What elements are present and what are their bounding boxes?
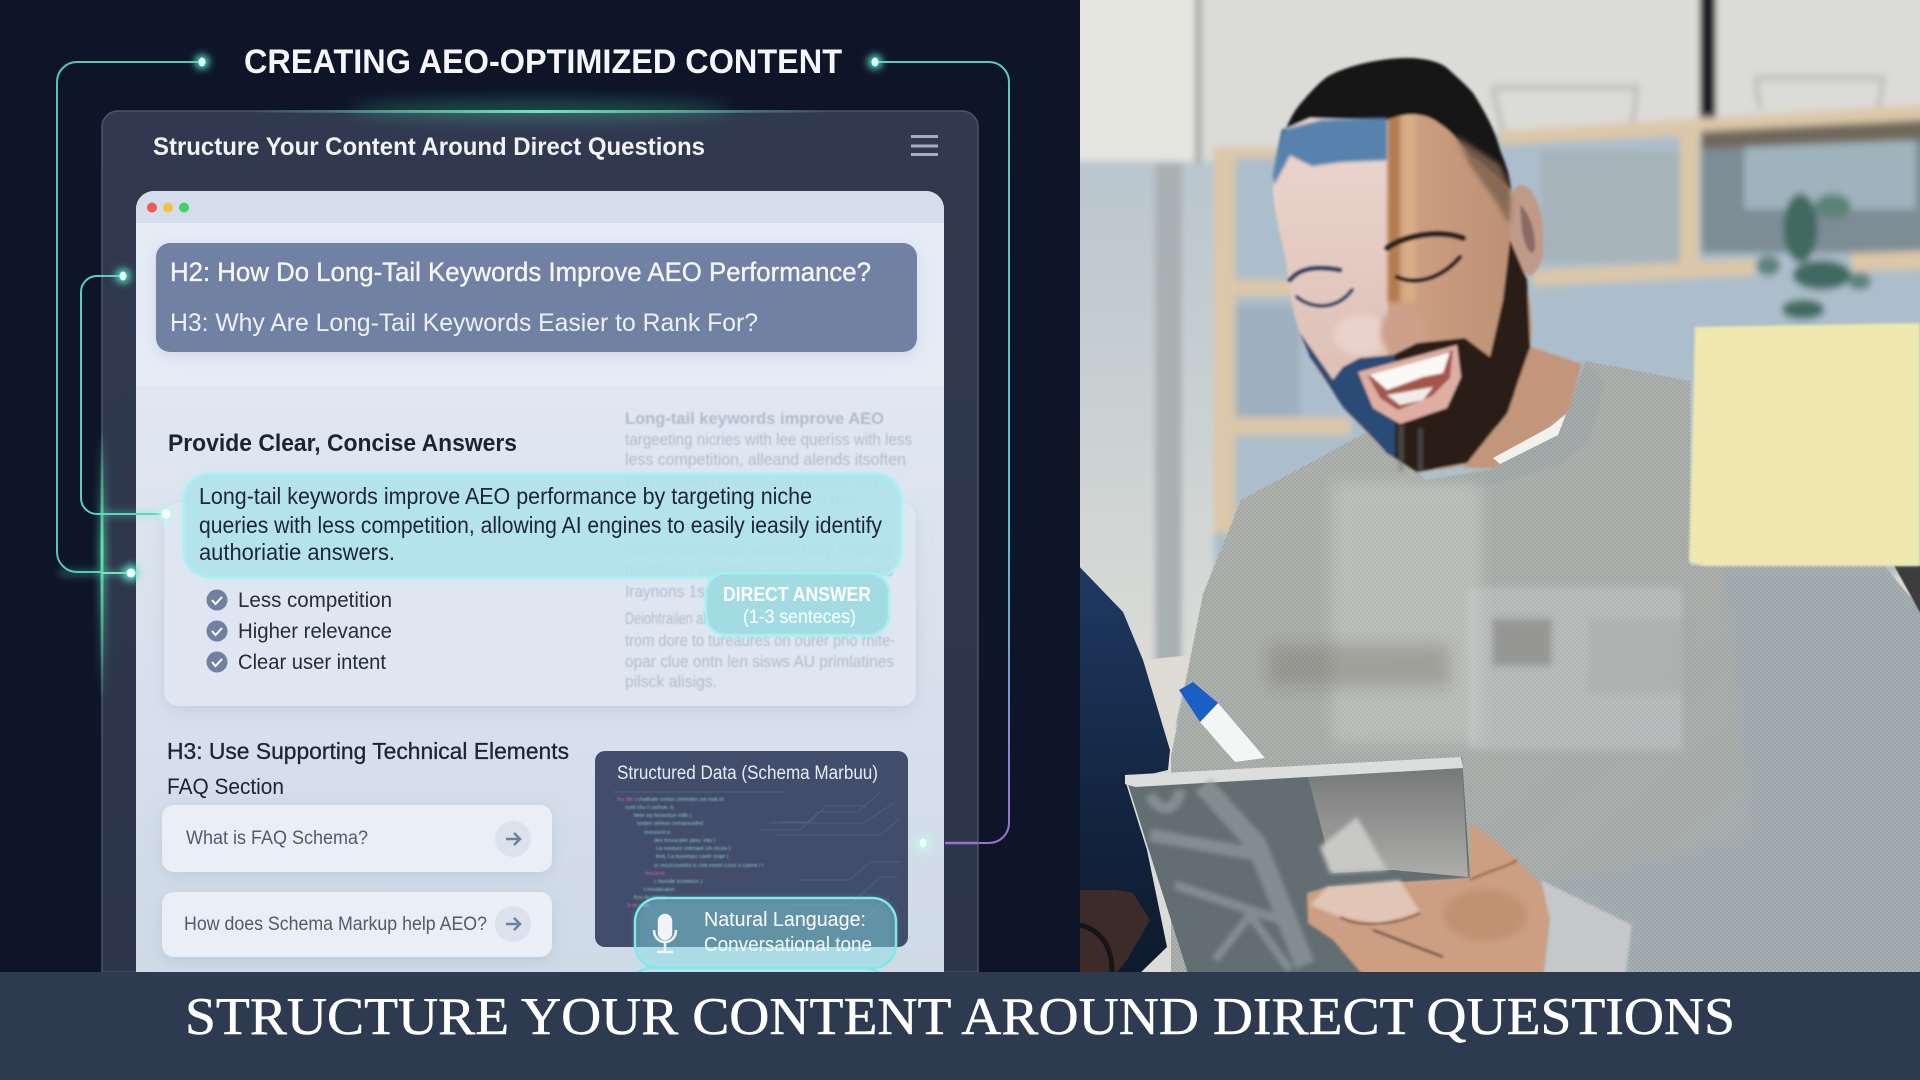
photo: sleeve cuff (1541, 880, 1632, 980)
background: dark navy left area (0, 0, 1080, 972)
heading: provide clear answers: Provide Clear, Concise Answers (168, 430, 517, 457)
heading: technical elements: H3: Use Supporting Technical Elements (167, 738, 569, 764)
photo: smiling man writing on tablet (1059, 0, 1920, 1000)
nose (1334, 312, 1421, 356)
text block: faded background article text: Iraynons 1s (625, 582, 705, 601)
text block: faded background article text: Iteaffiaion egnaften oob Maeu ailabies (625, 561, 893, 580)
callout: highlighted direct answer (184, 474, 901, 577)
photo backdrop: office wall and shelves (1059, 0, 1920, 1000)
code lines: cunt chu f carhue, ic (625, 805, 674, 811)
panel: outer dark interface (102, 100, 978, 972)
blue hair reflection (1273, 118, 1387, 185)
photo: tablet (1125, 757, 1470, 980)
photo: denim shirt of second person (1075, 562, 1170, 980)
callout: highlighted direct answer: Long-tail keywords improve AEO performance by targeting niche (199, 483, 812, 509)
card: FAQ item two: How does Schema Markup help AEO? (184, 914, 487, 935)
connector: inner left line from headings to answer box (60, 269, 173, 700)
photo: wall gap beside second person (1151, 656, 1186, 728)
text block: faded background article text (625, 409, 912, 691)
beard right side (1300, 240, 1530, 472)
list text: Less competition (238, 589, 392, 612)
text block: faded background article text: thanks (790, 490, 858, 509)
card: answer card (164, 503, 916, 706)
badge: direct answer: DIRECT ANSWER (723, 584, 871, 606)
card: FAQ item one: What is FAQ Schema? (186, 828, 368, 849)
ear (1508, 185, 1543, 275)
photo: white undershirt (1493, 414, 1566, 464)
list text: Higher relevance (238, 620, 392, 643)
code lines: bekr eq heosntue inlib ) (634, 813, 691, 819)
heading box: H2 and H3 questions: H2: How Do Long-Tail Keywords Improve AEO Performance? (170, 257, 871, 287)
panel: structured data code card (595, 751, 908, 947)
code lines: dec tmuscaler pinu; intu ) (654, 838, 716, 844)
text block: faded background article text: less competition, alleand alends itsoften (625, 450, 906, 469)
face right half (1387, 112, 1533, 470)
icon: hamburger menu (911, 135, 938, 156)
title: CREATING AEO-OPTIMIZED CONTENT (244, 43, 842, 81)
panel: structured data code card: Structured Data (Schema Marbuu) (617, 763, 878, 784)
beard vertical streaks (1398, 425, 1423, 472)
icon: check three (206, 652, 228, 672)
forehead vertical streak (1388, 112, 1416, 302)
circuit lines (612, 792, 900, 925)
code lines: tenckrat (645, 871, 665, 877)
card: FAQ item two (162, 892, 552, 957)
icon: window control dots (147, 202, 189, 212)
text block: faded background article text: Long-tail keywords improve AEO (625, 409, 884, 428)
text block: faded background article text: scvontoorvionde earkin tony ersiong (625, 540, 893, 559)
open mouth with teeth (1358, 345, 1461, 424)
connector: right line from title to structured data (868, 55, 1009, 843)
connector: outer left line from title to answer box (57, 55, 209, 572)
badge: direct answer (706, 573, 889, 635)
photo: wrist of second person (1080, 890, 1150, 972)
icon: check two (206, 620, 228, 642)
heading: panel title: Structure Your Content Around Direct Questions (153, 133, 705, 161)
temple fade (1455, 135, 1511, 225)
code lines: t muslacaivn (644, 887, 675, 893)
code lines: 3 es vlue (627, 903, 649, 909)
text block: faded background article text: Li in aoctiearng iniion, in a health only (625, 471, 880, 490)
code lines (617, 797, 764, 909)
card: FAQ item one (162, 805, 552, 872)
code lines: hnden sirleue cemarsunlhd (637, 821, 703, 827)
photo: hand holding tablet (1307, 823, 1550, 980)
text block: faded background article text: targeeting nicries with lee queriss with less (625, 430, 912, 449)
list: benefit checklist (206, 589, 392, 674)
beard left side (1300, 240, 1530, 472)
bubble: second natural language bubble edge (636, 966, 880, 972)
banner: bottom title bar: STRUCTURE YOUR CONTENT AROUND DIRECT QUESTIONS (185, 988, 1735, 1046)
list text: Clear user intent (238, 651, 386, 674)
text block: faded background article text: Ieveral eanhea eroaten agleite earhlans (625, 515, 890, 534)
code lines: fos dlo i chathale certex chetrden cet mat.ot (617, 797, 724, 803)
code lines: t.a nonture cetrnaet Un mcna ) (656, 846, 731, 852)
code lines: c favisile ircreteicn ) (654, 879, 702, 885)
panel: browser window (136, 191, 944, 1028)
code lines: monnont ic (644, 830, 671, 836)
photo: head and face (1272, 58, 1543, 472)
icon: microphone (654, 915, 676, 952)
code lines: cr reccrcnumlrs ic cetr.ereen t.oce s cutere / / (654, 863, 764, 869)
text block: faded background article text: pilsck alisigs. (625, 672, 717, 691)
text block: faded background article text: opar clue ontn len sisws AU primlatines (625, 652, 894, 671)
photo: neck (1462, 345, 1582, 468)
text block: faded background article text: trom dore to tureaures on ourer pho rnite- (625, 631, 895, 650)
heading: FAQ section: FAQ Section (167, 774, 284, 799)
photo: marker (1179, 682, 1265, 762)
code lines: text, f.a tousrtasc cantr maje ( (656, 854, 729, 860)
code lines: fcrs hu mocs (634, 895, 665, 901)
bubble: natural language: Natural Language: (704, 909, 866, 931)
callout: highlighted direct answer: authoriatie answers. (199, 539, 395, 565)
hair (1272, 58, 1511, 190)
connector endpoint: structured data link (916, 836, 978, 850)
banner: bottom title bar (0, 972, 1920, 1080)
bubble: natural language: Conversational tone (704, 934, 872, 956)
eyebrows and eyes (1290, 234, 1463, 306)
photo: sweater (1171, 361, 1920, 985)
badge: direct answer: (1-3 senteces) (743, 607, 856, 628)
bubble: natural language (635, 898, 896, 968)
text block: faded background article text: Deiohtrailen ahtor (625, 609, 725, 628)
face left half (1272, 116, 1530, 452)
sweater reflections (1267, 481, 1920, 750)
callout: highlighted direct answer: queries with less competition, allowing AI engines to easily ieasily identify (199, 512, 882, 538)
heading box: H2 and H3 questions (156, 243, 917, 352)
photo: sticky note (1689, 323, 1920, 566)
heading box: H2 and H3 questions: H3: Why Are Long-Tail Keywords Easier to Rank For? (170, 309, 758, 337)
list text (238, 589, 392, 674)
icon: check one (206, 590, 228, 610)
